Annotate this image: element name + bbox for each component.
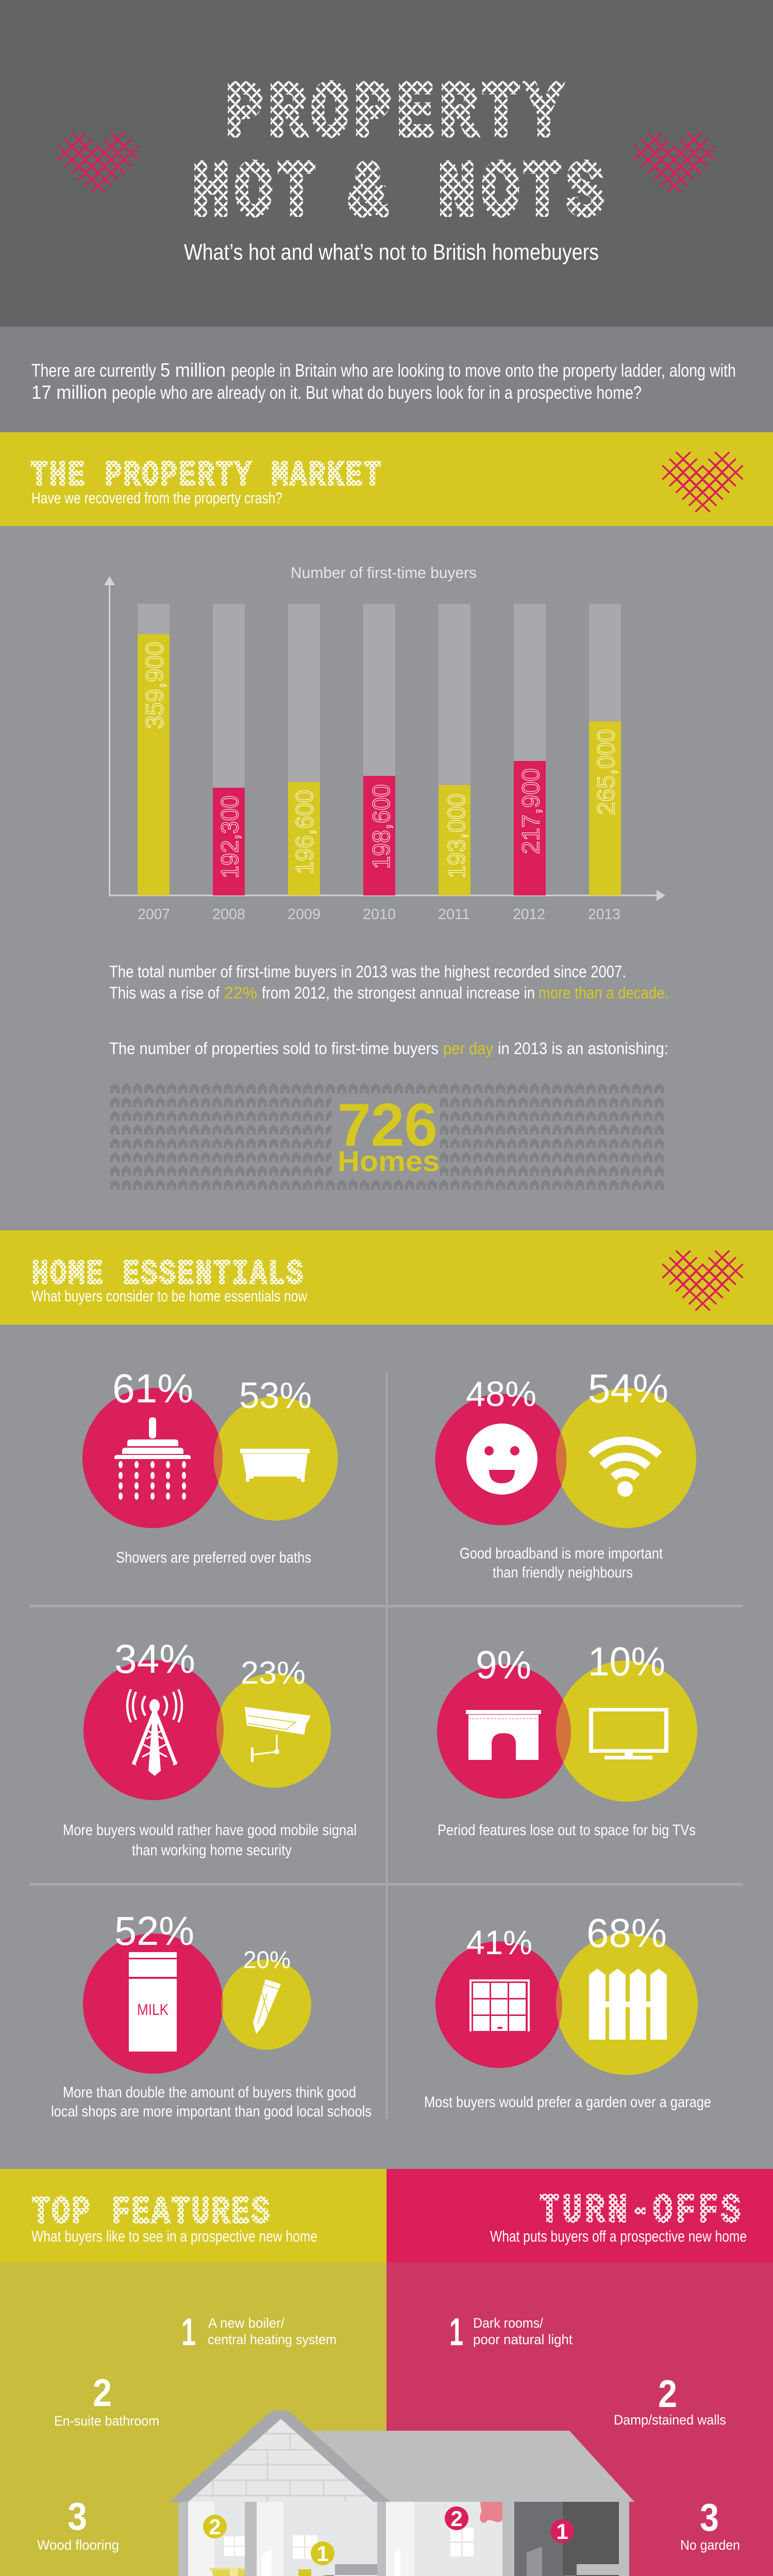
- bar 2007: [138, 634, 170, 895]
- section band: home essentials: [0, 1230, 773, 1325]
- bar 2012: 217,900: [517, 768, 544, 854]
- panel: garden vs garage: 68%: [586, 1910, 667, 1956]
- title: PROPERTY: [226, 70, 568, 159]
- caption: Most buyers would prefer a garden over a garage: [424, 2094, 711, 2111]
- pictogram: 726 homes: Homes: [338, 1145, 440, 1177]
- panel: top features background: [0, 2263, 386, 2576]
- caption: local shops are more important than good local schools: [51, 2103, 372, 2120]
- intro panel: 5 million: [160, 360, 226, 381]
- bar 2010: 198,600: [367, 784, 395, 869]
- text block: 2013 summary: [109, 962, 668, 1002]
- section band: the property market: THE PROPERTY MARKET: [31, 456, 382, 496]
- marker 1: 1: [556, 2519, 568, 2544]
- text block: per day: [109, 1039, 668, 1058]
- turn-off 1: Dark rooms/: [473, 2315, 543, 2331]
- caption: Showers are preferred over baths: [116, 1549, 311, 1566]
- year labels: 2012: [513, 906, 545, 923]
- feature 3: 3: [68, 2495, 87, 2538]
- section band: the property market: Have we recovered from the property crash?: [31, 489, 282, 507]
- feature 2: En-suite bathroom: [54, 2413, 159, 2429]
- bar chart: first-time buyers: [104, 564, 665, 923]
- year labels: 2011: [438, 906, 470, 923]
- turn-off 1: poor natural light: [473, 2332, 573, 2347]
- panel: broadband vs neighbours: [435, 1365, 696, 1581]
- text block: per day: in 2013 is an astonishing:: [498, 1039, 668, 1058]
- bar 2013: 265,000: [592, 729, 619, 815]
- feature 1: 1: [181, 2310, 196, 2353]
- intro panel: people who are already on it. But what do buyers look for in a prospective home?: [112, 383, 642, 403]
- intro panel: There are currently: [31, 361, 156, 381]
- caption: Good broadband is more important: [460, 1545, 663, 1562]
- icon: right heart: [634, 133, 714, 193]
- year labels: [138, 906, 620, 923]
- feature 1: [181, 2310, 337, 2353]
- turn-off 3: No garden: [680, 2537, 740, 2553]
- gable frame: [170, 2411, 390, 2502]
- turn-offs band: [386, 2169, 773, 2263]
- feature 1: central heating system: [208, 2332, 337, 2347]
- panel: shops vs schools: [51, 1908, 372, 2120]
- panel: mobile signal vs security: [63, 1636, 357, 1859]
- intro panel: [0, 327, 773, 432]
- marker 1: [550, 2519, 574, 2544]
- panel: showers vs baths: 53%: [239, 1376, 312, 1416]
- intro panel: 17 million: [31, 382, 107, 403]
- feature 3: Wood flooring: [37, 2537, 119, 2553]
- house markers: turn-offs: [412, 2506, 653, 2576]
- text block: 2013 summary: from 2012, the strongest annual increase in: [262, 984, 535, 1002]
- turn-off 2: Damp/stained walls: [614, 2412, 726, 2428]
- icon: smiley: [466, 1423, 537, 1495]
- feature 2: [54, 2371, 159, 2429]
- panel: showers vs baths: 61%: [112, 1365, 193, 1411]
- panel: period features vs TVs: [437, 1638, 697, 1839]
- panel: market body: [0, 526, 773, 1230]
- marker 2: [445, 2506, 468, 2531]
- room: bathroom: [188, 2502, 245, 2576]
- icon: wifi: [591, 1441, 659, 1497]
- panel: period features vs TVs: 9%: [476, 1643, 531, 1687]
- icon: pencil: [253, 1979, 281, 2034]
- bar 2013: [589, 721, 621, 895]
- bar backgrounds: [138, 604, 621, 895]
- bar chart: first-time buyers: Number of first-time buyers: [291, 564, 477, 582]
- marker 1: 1: [316, 2541, 329, 2566]
- walls: [178, 2502, 629, 2576]
- section band: home essentials: HOME ESSENTIALS: [32, 1256, 305, 1294]
- icon: garage door: [469, 1979, 530, 2031]
- icon: security camera: [245, 1707, 311, 1762]
- icon: mast: [127, 1689, 182, 1776]
- caption: [460, 1545, 663, 1581]
- bar 2009: [288, 782, 320, 895]
- feature 3: [37, 2495, 119, 2553]
- section band: the property market: [0, 432, 773, 526]
- pictogram: 726 homes: 726: [338, 1091, 438, 1159]
- caption: [51, 2084, 372, 2120]
- bar 2009: 196,600: [291, 790, 318, 874]
- panel: shops vs schools: 20%: [243, 1946, 291, 1973]
- bar 2008: 192,300: [216, 795, 243, 878]
- top features band: What buyers like to see in a prospective new home: [31, 2227, 317, 2245]
- caption: More buyers would rather have good mobile signal: [63, 1822, 357, 1839]
- panel: shops vs schools: 52%: [114, 1908, 194, 1954]
- panel: garden vs garage: 41%: [466, 1923, 532, 1961]
- list: turn-offs: [449, 2310, 751, 2576]
- room: dark bedroom: [514, 2502, 619, 2576]
- text block: 2013 summary: 22%: [224, 984, 257, 1002]
- turn-off 3: 3: [700, 2496, 719, 2539]
- turn-off 2: [614, 2372, 726, 2428]
- chart axes: [104, 576, 665, 901]
- year labels: 2013: [588, 906, 620, 923]
- bar 2011: [439, 785, 470, 895]
- room: bedroom: [257, 2502, 377, 2576]
- house illustration: [170, 2411, 634, 2576]
- main roof: [311, 2431, 634, 2502]
- feature 2: 2: [93, 2371, 112, 2414]
- bar 2008: [213, 788, 245, 895]
- panel: broadband vs neighbours: 54%: [588, 1365, 668, 1411]
- icon: left heart: [58, 133, 138, 193]
- list: top features: [18, 2310, 351, 2576]
- year labels: 2010: [363, 906, 396, 923]
- turn-offs band: TURN-OFFS: [540, 2188, 744, 2234]
- marker 2: 2: [450, 2506, 463, 2531]
- year labels: 2009: [288, 906, 321, 923]
- room: damp walls: [386, 2502, 502, 2576]
- year labels: 2008: [212, 906, 245, 923]
- feature 1: A new boiler/: [208, 2315, 284, 2331]
- panel: mobile signal vs security: 34%: [114, 1636, 195, 1682]
- header panel: [0, 0, 773, 327]
- turn-off 2: 2: [658, 2372, 677, 2415]
- bar 2010: [363, 776, 395, 895]
- bar 2007: 359,900: [141, 642, 168, 729]
- text block: 2013 summary: more than a decade.: [539, 984, 668, 1002]
- panel: home essentials body: [0, 1325, 773, 2169]
- text block: 2013 summary: This was a rise of: [109, 984, 220, 1002]
- marker 2: 2: [209, 2515, 221, 2539]
- caption: Period features lose out to space for big TVs: [438, 1822, 696, 1839]
- bar 2011: 193,000: [443, 793, 470, 878]
- gable brickwork: [188, 2419, 374, 2502]
- panel: period features vs TVs: 10%: [588, 1638, 665, 1684]
- bar 2012: [514, 761, 546, 895]
- icon: picket fence: [589, 1969, 667, 2040]
- icon: television: [589, 1708, 668, 1759]
- section band: home essentials: What buyers consider to be home essentials now: [31, 1287, 307, 1305]
- caption: [63, 1822, 357, 1859]
- turn-off 1: 1: [449, 2310, 463, 2353]
- pictogram: 726 homes: [110, 1083, 665, 1193]
- house markers: top features: [152, 2515, 349, 2576]
- title: [192, 70, 604, 239]
- marker 2: [203, 2515, 227, 2539]
- panel: turn-offs background: [386, 2263, 773, 2576]
- panel: mobile signal vs security: 23%: [241, 1655, 306, 1691]
- icon: milk carton: MILK: [137, 2001, 169, 2019]
- panel: showers vs baths: [82, 1365, 338, 1566]
- turn-off 3: [680, 2496, 740, 2553]
- text block: 2013 summary: The total number of first-time buyers in 2013 was the highest recorded since 2007.: [109, 962, 626, 981]
- caption: than friendly neighbours: [493, 1564, 633, 1581]
- top features band: TOP FEATURES: [32, 2191, 271, 2234]
- text block: per day: per day: [443, 1039, 493, 1058]
- turn-off 1: [449, 2310, 573, 2353]
- marker 1: [311, 2541, 334, 2566]
- panel: garden vs garage: [424, 1910, 711, 2111]
- icon: milk carton: [129, 1952, 177, 2052]
- panel: broadband vs neighbours: 48%: [466, 1374, 536, 1414]
- icon: fireplace arch: [466, 1710, 541, 1760]
- icon: shower: [114, 1417, 191, 1500]
- year labels: 2007: [138, 906, 170, 923]
- panel dividers: [29, 1373, 743, 2119]
- caption: More than double the amount of buyers think good: [63, 2084, 356, 2101]
- subtitle: What’s hot and what’s not to British homebuyers: [184, 240, 599, 265]
- caption: than working home security: [132, 1842, 292, 1859]
- top features band: [0, 2169, 386, 2263]
- icon: bath: [240, 1449, 310, 1482]
- title: HOT & NOTS: [192, 149, 604, 239]
- text block: per day: The number of properties sold to first-time buyers: [109, 1039, 439, 1058]
